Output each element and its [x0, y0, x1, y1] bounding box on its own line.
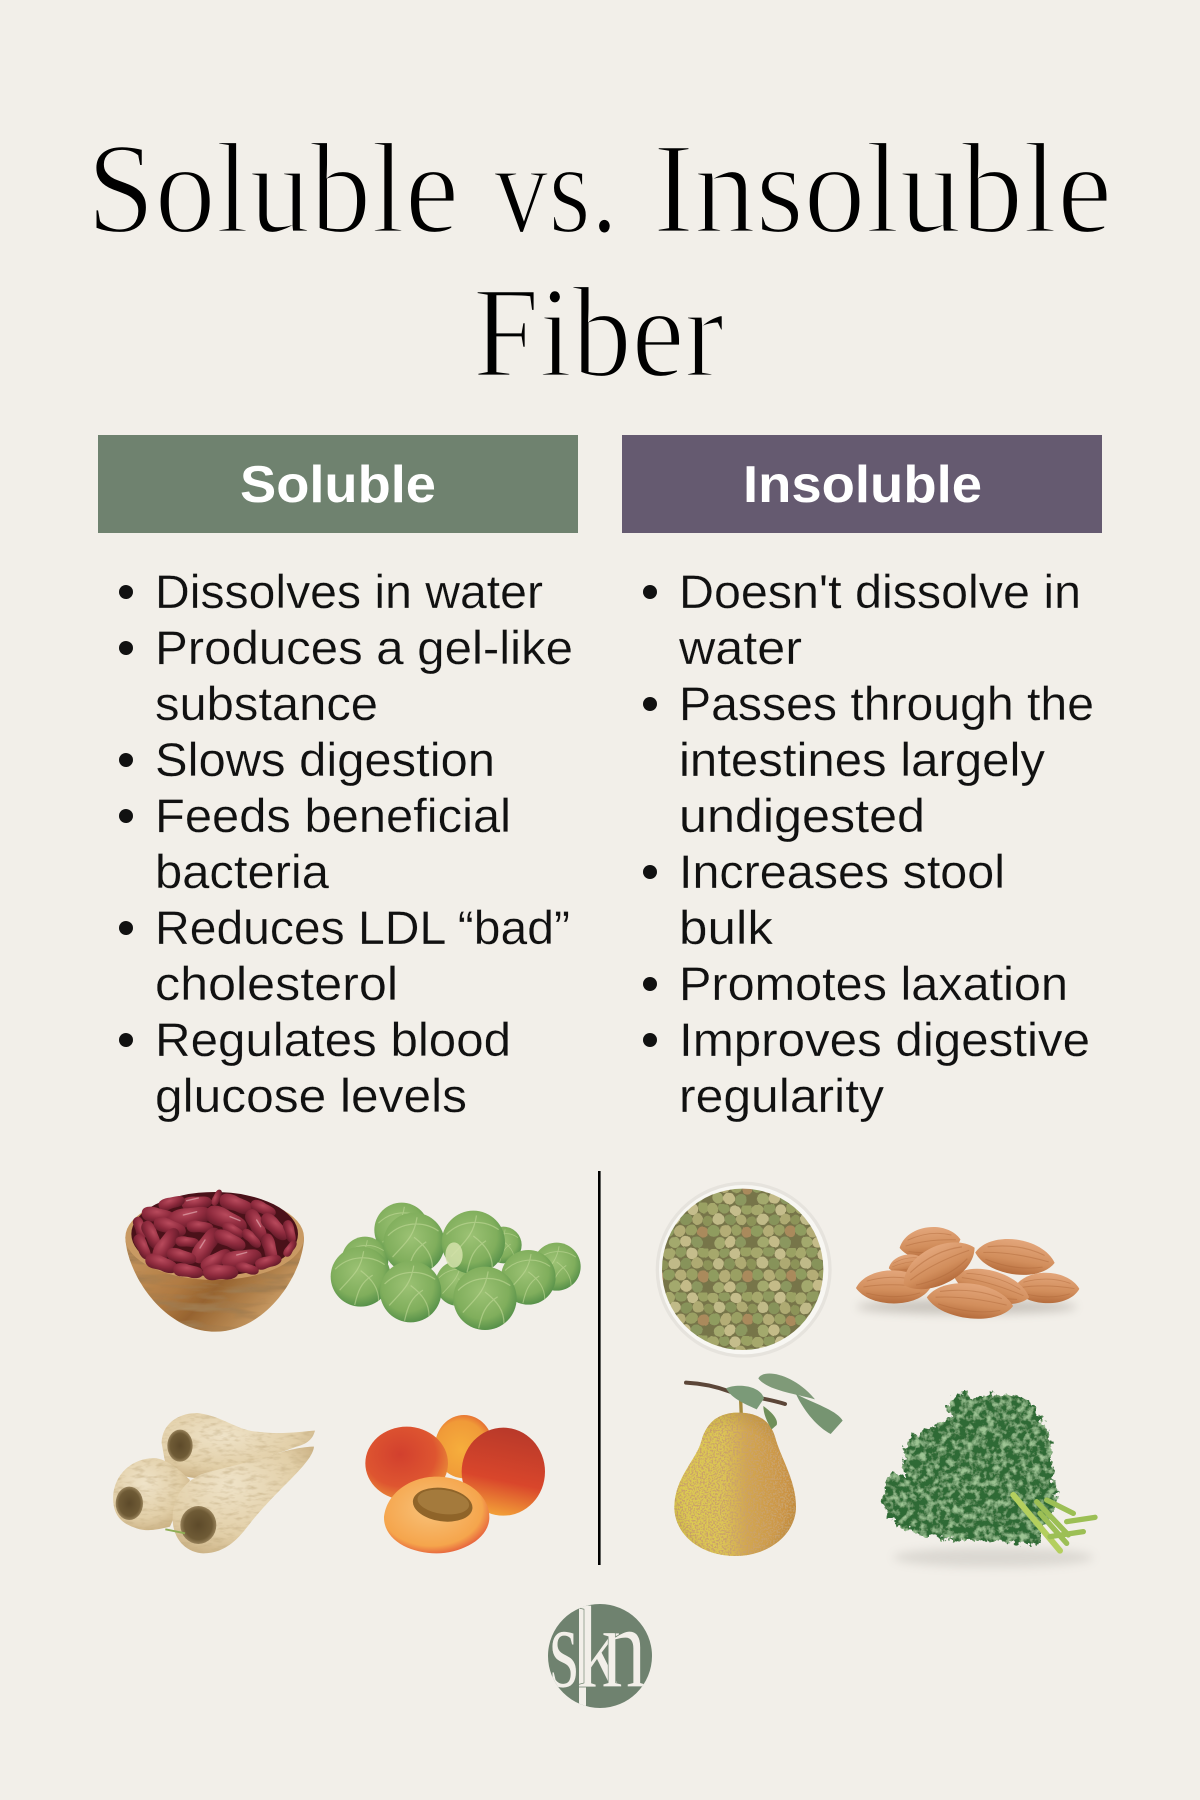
bullet: laxation: Promotes laxation: [679, 957, 1068, 1010]
header: Insoluble: Insoluble: [743, 456, 982, 514]
bullet: stool bulk: [643, 845, 1005, 954]
bullet: regularity: regularity: [679, 1069, 885, 1122]
bullet: stool bulk: Increases stool: [679, 845, 1005, 898]
bullet: glucose: Regulates blood: [155, 1013, 511, 1066]
bullet: bacteria: [119, 789, 511, 898]
title: [87, 117, 1112, 405]
icon: brussels sprouts: [331, 1203, 581, 1330]
bullet: undigested: [643, 677, 1094, 842]
icon: parsnips: [113, 1413, 315, 1553]
title: Fiber: [473, 261, 724, 405]
bullet: bacteria: bacteria: [155, 845, 330, 898]
header: Insoluble: [622, 435, 1102, 533]
bullet: undigested: Passes through the: [679, 677, 1094, 730]
icon: pear with leaves: [674, 1374, 843, 1556]
logo: skn monogram: [548, 1604, 652, 1708]
header: Soluble: [98, 435, 578, 533]
bullet: cholesterol: cholesterol: [155, 957, 398, 1010]
insoluble food images: [650, 1177, 1095, 1567]
bullet: glucose: [119, 1013, 511, 1122]
logo: skn monogram: n: [601, 1582, 647, 1713]
bullet: does not dissolve: water: [678, 621, 802, 674]
icon: almonds: [855, 1225, 1080, 1324]
icon: lentils in white bowl: [656, 1182, 832, 1358]
panel: insoluble bullet list: [643, 565, 1094, 1122]
bullet: digestion: Slows digestion: [155, 733, 495, 786]
soluble food images: [113, 1188, 581, 1553]
bullet: glucose: glucose levels: [155, 1069, 467, 1122]
bullet: undigested: undigested: [679, 789, 925, 842]
bullet: cholesterol: [119, 901, 570, 1010]
bullet: dissolves: Dissolves in water: [155, 565, 543, 618]
header: Soluble: Soluble: [240, 456, 436, 514]
bullet: regularity: [643, 1013, 1090, 1122]
icon: kale: [884, 1390, 1095, 1567]
bullet: stool bulk: bulk: [679, 901, 774, 954]
bullet: does not dissolve: [643, 565, 1081, 674]
bullet: does not dissolve: Doesn't dissolve in: [679, 565, 1081, 618]
bullet: cholesterol: Reduces LDL “bad”: [155, 901, 570, 954]
icon: kidney beans in wooden bowl: [125, 1188, 304, 1332]
panel: soluble bullet list: [119, 565, 573, 1122]
bullet: regularity: Improves digestive: [679, 1013, 1090, 1066]
bullet: gel: [119, 621, 573, 730]
title: Soluble: [87, 117, 459, 261]
bullet: gel: substance: [155, 677, 378, 730]
logo: skn monogram: k: [576, 1582, 622, 1713]
title: vs.: [494, 117, 618, 261]
bullet: gel: Produces a gel-like: [155, 621, 573, 674]
icon: apricots: [365, 1415, 545, 1553]
divider line: [598, 1171, 601, 1565]
bullet: bacteria: Feeds beneficial: [155, 789, 511, 842]
logo: skn monogram: s: [549, 1582, 579, 1713]
bullet: undigested: intestines largely: [679, 733, 1046, 786]
title: Insoluble: [653, 117, 1112, 261]
